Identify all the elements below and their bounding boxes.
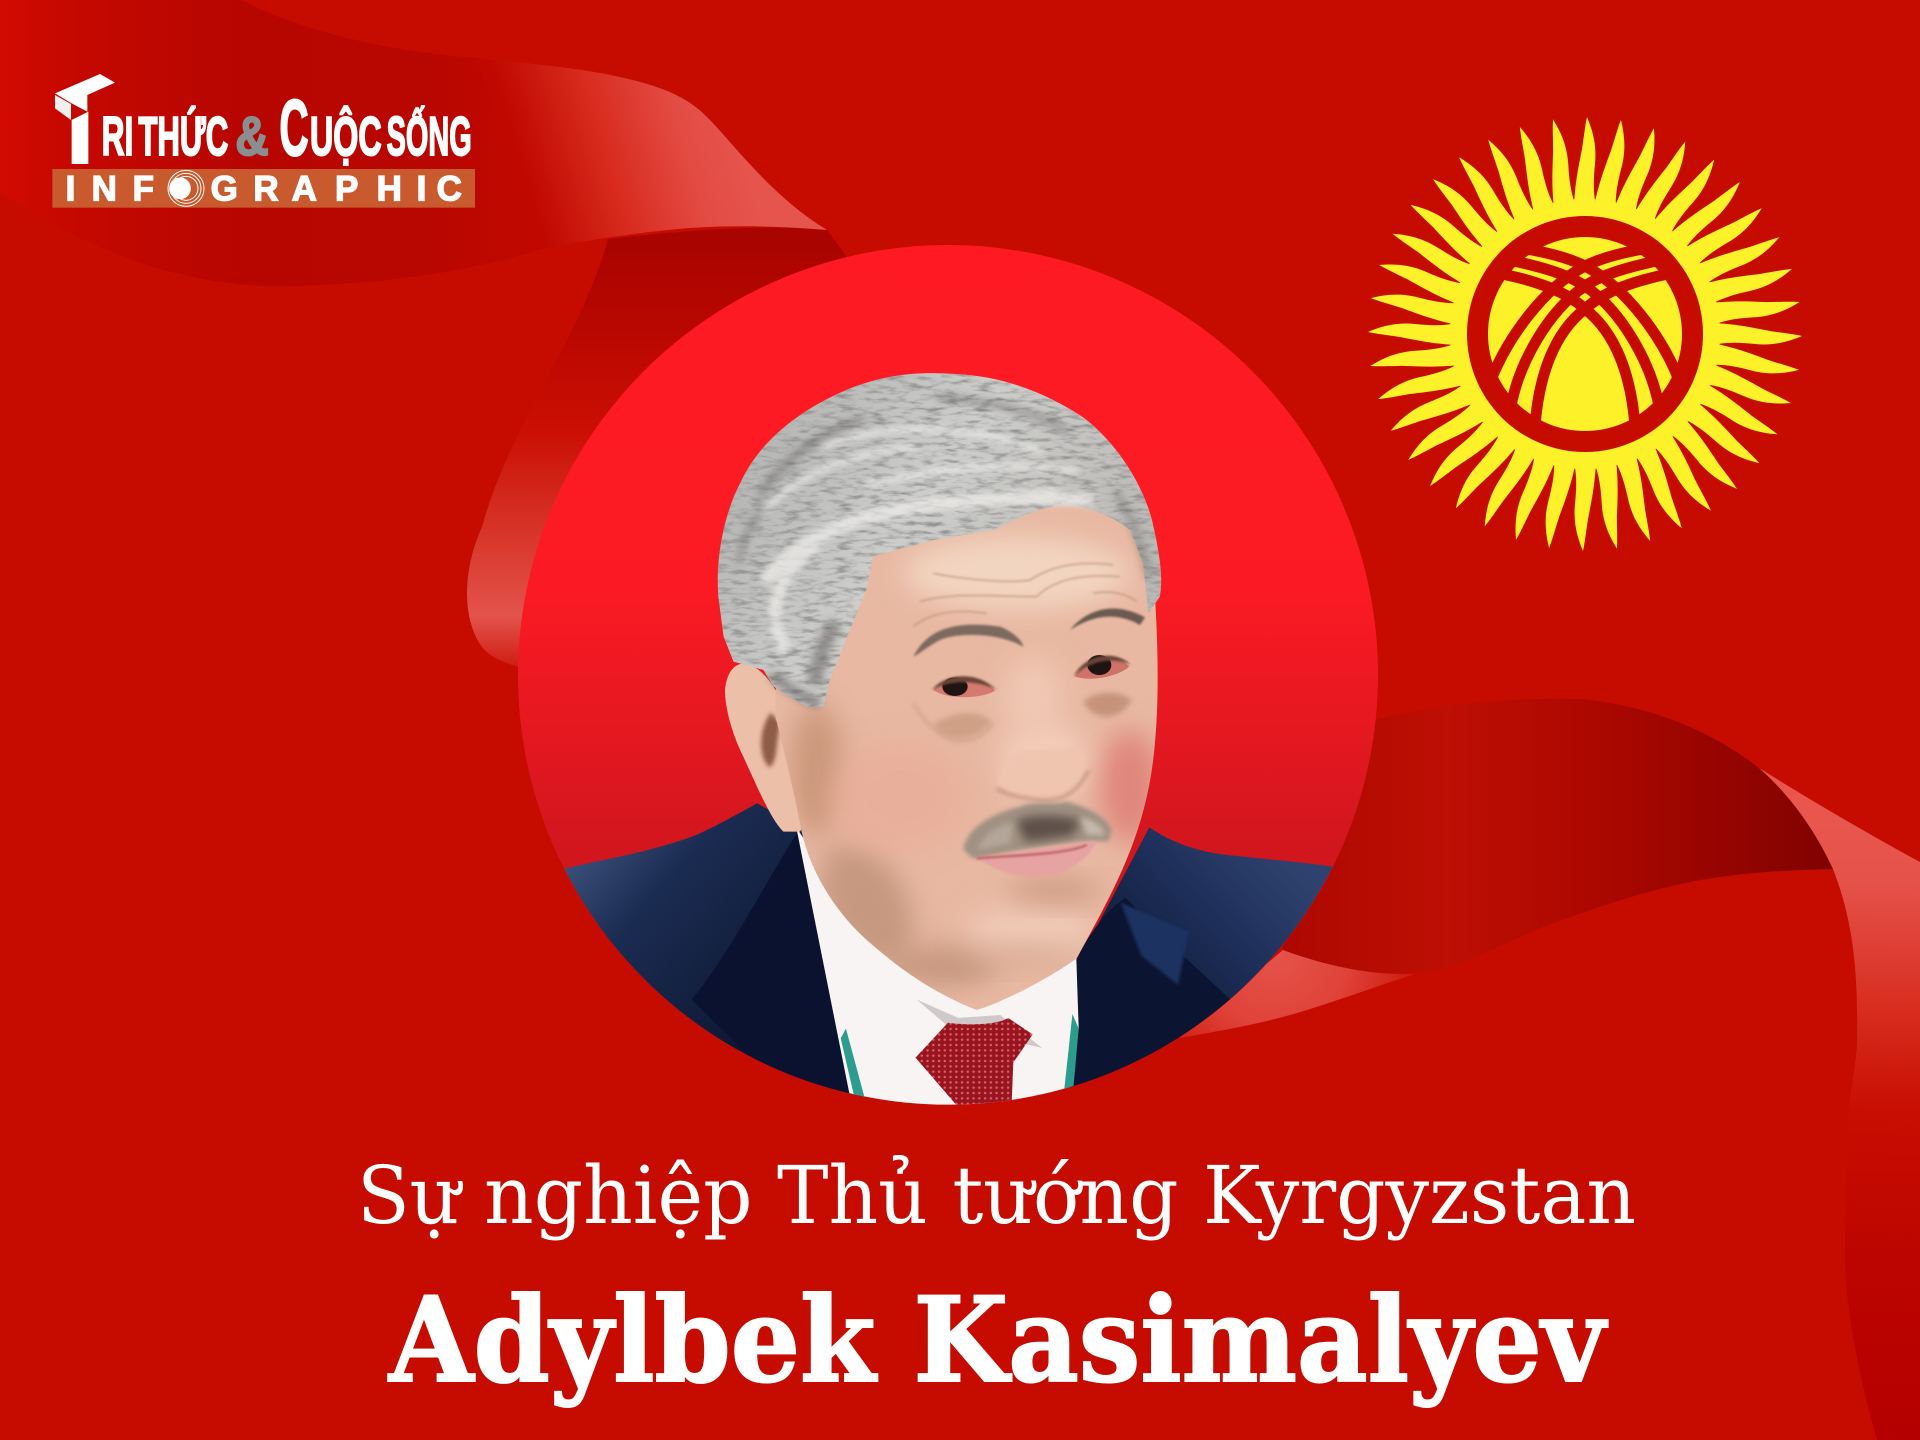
- name heading: Adylbek Kasimalyev: [388, 1271, 1608, 1409]
- ribbon: top left dark swath: [0, 0, 545, 286]
- ribbon: right curl: [1759, 768, 1920, 1440]
- ribbon: upper fold behind portrait: [467, 228, 900, 667]
- emblem: Kyrgyz sun: [1368, 117, 1802, 551]
- logo: wordmark: RI: [102, 105, 133, 167]
- portrait: ear: [725, 663, 808, 832]
- logo: Tri Thức & Cuộc Sống Infographic: [52, 74, 475, 209]
- portrait: eyes: [932, 655, 1131, 697]
- portrait: Adylbek Kasimalyev: [540, 373, 1356, 1126]
- portrait: shirt and lanyard: [796, 827, 1079, 1116]
- logo: wordmark: UỘC: [310, 105, 382, 167]
- portrait: hair: [718, 373, 1161, 707]
- ribbon: top left highlight: [476, 58, 827, 248]
- logo: O mark: [168, 170, 204, 206]
- portrait: face and neck: [775, 500, 1160, 1010]
- ribbon: lower highlight: [1179, 950, 1415, 1038]
- emblem: sun rays: [1368, 117, 1802, 551]
- logo: wordmark: &: [235, 105, 269, 167]
- portrait: forehead wrinkles: [913, 563, 1137, 627]
- title: Sự nghiệp Thủ tướng Kyrgyzstan: [357, 1149, 1636, 1242]
- portrait: moustache: [963, 802, 1112, 858]
- logo: wordmark: THỨC: [138, 105, 228, 167]
- portrait: nose: [997, 747, 1088, 801]
- portrait: lips: [977, 842, 1097, 877]
- logo: infographic bar: INFGRAPHIC: [66, 170, 462, 209]
- portrait: under-eye bags: [913, 693, 1132, 741]
- ribbon: lower right dark fold: [1283, 699, 1833, 974]
- portrait: tie: [916, 1018, 1033, 1105]
- logo: wordmark: [102, 83, 472, 172]
- portrait: suit: [564, 803, 1333, 1098]
- logo: wordmark: SỐNG: [387, 105, 472, 167]
- portrait circle: [518, 245, 1378, 1105]
- portrait: eyebrows: [913, 608, 1145, 657]
- logo: T mark: [55, 74, 115, 164]
- logo: wordmark: C: [279, 83, 309, 172]
- emblem: tunduk ring: [1467, 216, 1703, 452]
